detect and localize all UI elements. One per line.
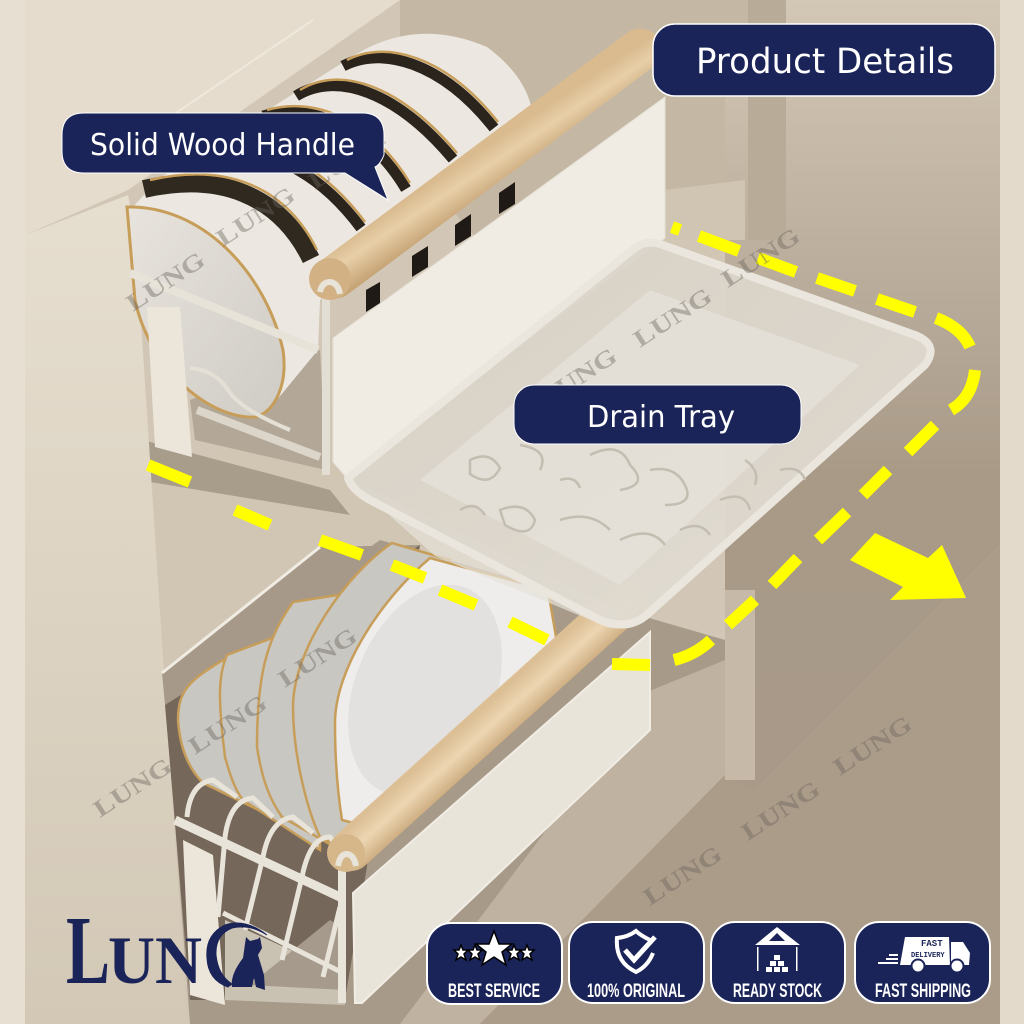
logo: LUNG: L (66, 897, 110, 1005)
watermarks: LUNG (122, 247, 210, 317)
water droplets (460, 429, 805, 545)
lower rack: dark interior (165, 545, 420, 1005)
label: Solid Wood Handle callout (62, 113, 388, 200)
watermarks: LUNG (737, 776, 825, 846)
lower wood handle (327, 602, 625, 872)
badge: best service: BEST SERVICE (448, 981, 540, 1002)
label: Product Details: Product Details (696, 42, 954, 82)
drain tray (348, 243, 931, 628)
badge: fast shipping: FAST SHIPPING (875, 981, 971, 1002)
upper wood handle (309, 50, 640, 300)
badge: ready stock (711, 922, 845, 1003)
logo: LUNG: UN (108, 922, 202, 998)
badge: best service (427, 923, 562, 1004)
badge: 100% original: 100% ORIGINAL (587, 981, 685, 1002)
label: Drain Tray (514, 385, 801, 444)
badge: fast shipping (855, 922, 990, 1003)
lower front panel (353, 632, 650, 1003)
front plate (127, 207, 284, 417)
badge: ready stock: READY STOCK (733, 981, 822, 1002)
upper rack: stacked plates (127, 34, 532, 470)
icon: crescent with cat (207, 923, 267, 990)
watermarks: LUNG (212, 182, 300, 252)
slits behind handle (366, 182, 515, 312)
watermarks (89, 125, 917, 911)
watermarks: LUNG (629, 283, 717, 353)
lower shelf underside and lip (162, 545, 420, 705)
watermarks: LUNG (829, 711, 917, 781)
plate rims and dark gaps (144, 52, 498, 259)
watermarks: LUNG (717, 223, 805, 293)
watermarks: LUNG (304, 125, 392, 195)
icon: stars (454, 931, 534, 965)
upper front panel (333, 97, 665, 476)
watermarks: LUNG (89, 753, 177, 823)
icon: warehouse (755, 927, 800, 972)
badge: 100% original (569, 922, 704, 1003)
icon: delivery truck: DELIVERY (911, 952, 945, 960)
watermarks: LUNG (639, 841, 727, 911)
watermarks: LUNG (534, 343, 622, 413)
yellow dashed pull-out path (148, 227, 975, 665)
icon: delivery truck: FAST (921, 939, 943, 949)
lower rack: wire dish rack (175, 780, 352, 1005)
logo: LUNG (66, 897, 267, 1005)
label: Solid Wood Handle callout: Solid Wood Handle (90, 128, 355, 163)
watermarks: LUNG (184, 690, 272, 760)
lower rack: plates (178, 543, 560, 850)
counter top and left cabinet door (25, 0, 400, 1024)
icon: delivery truck (878, 937, 970, 972)
label: Drain Tray: Drain Tray (587, 400, 735, 435)
yellow direction arrow (850, 533, 966, 600)
label: Product Details (653, 24, 995, 96)
icon: shield check (617, 931, 655, 972)
watermarks: LUNG (274, 623, 362, 693)
upper rack: wire frame and post (130, 273, 334, 475)
